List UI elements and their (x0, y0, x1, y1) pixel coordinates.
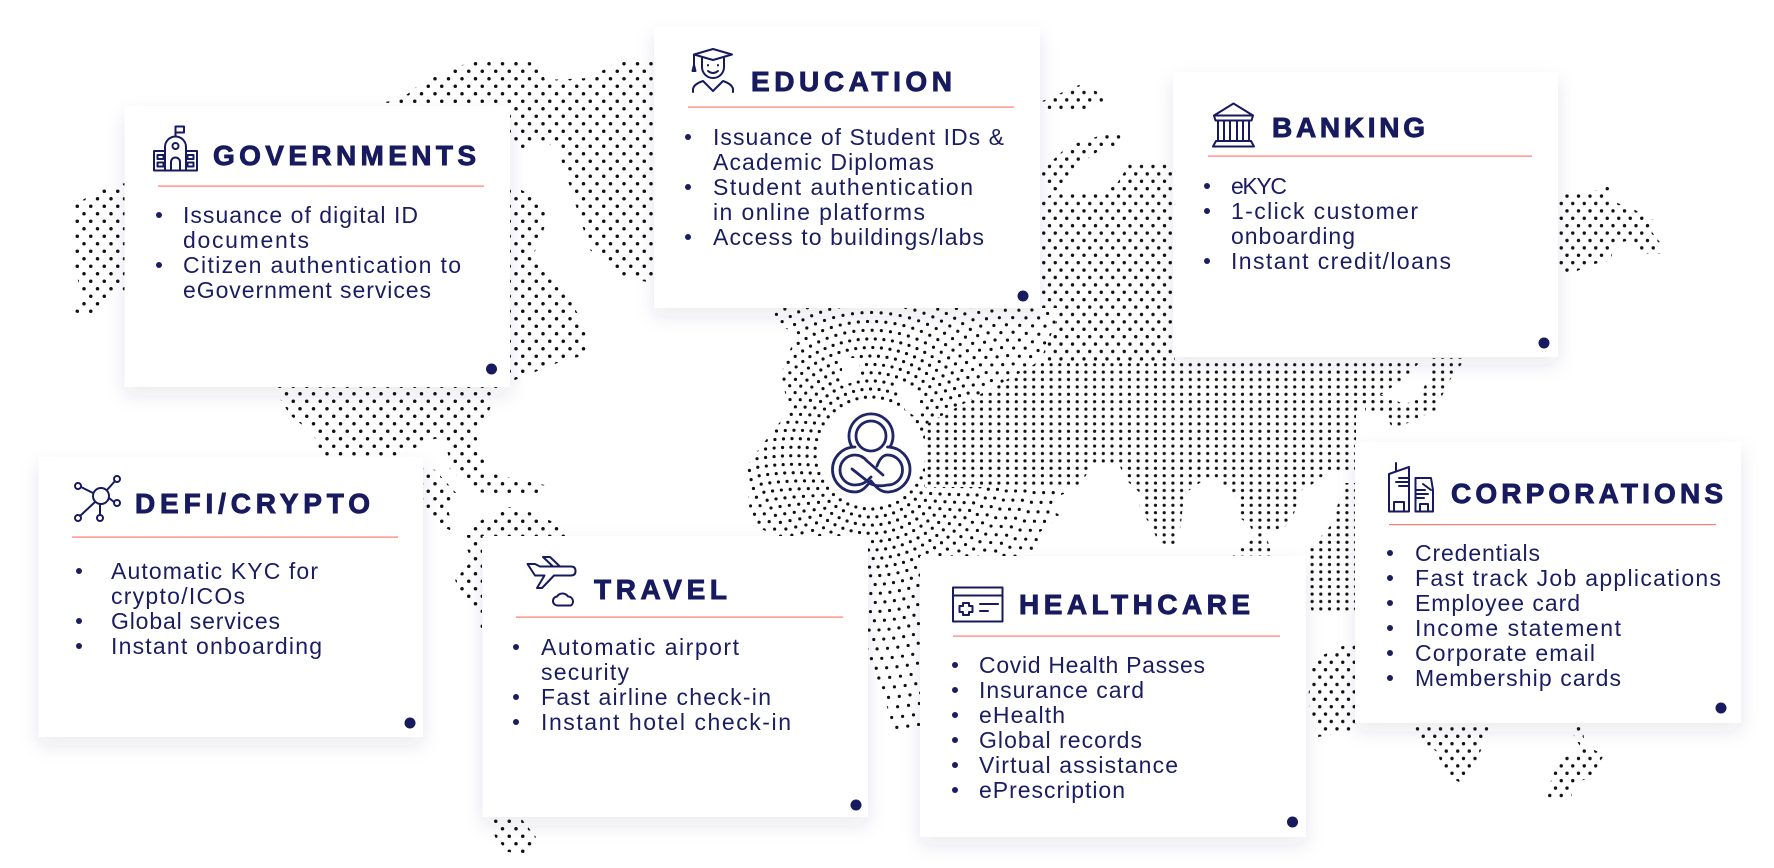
divider rule (1389, 524, 1716, 525)
corner dot (404, 718, 416, 728)
bullet list (1204, 173, 1451, 274)
bullet list: eGovernment services (183, 277, 431, 303)
bullet list: security (541, 659, 630, 685)
icon: bank (1213, 104, 1254, 146)
panel: banking (1173, 72, 1558, 357)
map: northern Eurasia and Pacific dot grid (1040, 85, 1662, 800)
bullet list: eKYC (1231, 173, 1287, 199)
bullet list: Issuance of Student IDs & (713, 124, 1004, 150)
bullet list: Instant credit/loans (1231, 248, 1451, 274)
bullet list: Covid Health Passes (979, 652, 1205, 678)
bullet list: Corporate email (1415, 640, 1595, 666)
divider rule (72, 536, 398, 538)
bullet list: Credentials (1415, 540, 1540, 566)
bullet list (156, 202, 461, 303)
bullet list: ePrescription (979, 777, 1125, 803)
logo (832, 414, 910, 492)
bullet list: in online platforms (713, 199, 925, 225)
bullet list: crypto/ICOs (111, 583, 245, 609)
divider rule (158, 186, 484, 187)
bullet list: Automatic airport (541, 634, 740, 660)
bullet list (952, 652, 1205, 803)
corner dot (850, 800, 862, 810)
heading: EDUCATION (751, 66, 952, 97)
bullet list (685, 124, 1004, 250)
bullet list: Issuance of digital ID (183, 202, 418, 228)
bullet list: Instant hotel check-in (541, 709, 791, 735)
bullet list: Insurance card (979, 677, 1144, 703)
panel: defi/crypto (38, 457, 423, 737)
bullet list: Citizen authentication to (183, 252, 461, 278)
bullet list: Global services (111, 608, 280, 634)
corner dot (1538, 338, 1550, 348)
icon: government building (154, 126, 197, 170)
corner dot (486, 364, 497, 374)
bullet list: onboarding (1231, 223, 1355, 249)
panel: education (654, 27, 1040, 308)
bullet list: Virtual assistance (979, 752, 1178, 778)
bullet list: Academic Diplomas (713, 149, 934, 175)
icon: airplane and cloud (528, 557, 576, 606)
divider rule (516, 616, 843, 618)
panel: governments (124, 106, 510, 387)
bullet list: Instant onboarding (111, 633, 322, 659)
corner dot (1287, 816, 1298, 828)
bullet list (513, 634, 791, 735)
bullet list: 1-click customer (1231, 198, 1418, 224)
bullet list: Global records (979, 727, 1142, 753)
heading: GOVERNMENTS (213, 140, 476, 171)
panel: healthcare (920, 556, 1306, 837)
icon: health card (953, 588, 1002, 622)
bullet list: Student authentication (713, 174, 973, 200)
icon: office buildings (1389, 463, 1433, 512)
heading: CORPORATIONS (1451, 478, 1723, 509)
heading: TRAVEL (594, 574, 727, 605)
map: Americas and Oceania dot grid (75, 58, 660, 854)
divider rule (1208, 156, 1532, 157)
map: white gaps near logo (842, 358, 921, 420)
bullet list: Access to buildings/labs (713, 224, 984, 250)
bullet list: Fast airline check-in (541, 684, 771, 710)
bullet list: Fast track Job applications (1415, 565, 1721, 591)
heading: HEALTHCARE (1019, 589, 1250, 620)
bullet list: eHealth (979, 702, 1065, 728)
divider rule (953, 636, 1280, 637)
bullet list: Membership cards (1415, 665, 1621, 691)
heading: DEFI/CRYPTO (135, 488, 370, 519)
heading: BANKING (1272, 112, 1425, 143)
icon: graduate (692, 49, 733, 92)
bullet list (76, 558, 322, 659)
panel: corporations (1355, 442, 1741, 723)
icon: network (75, 476, 120, 521)
map: concentric dot rings around logo (748, 308, 1064, 729)
bullet list (1387, 540, 1721, 691)
divider rule (688, 106, 1014, 108)
corner dot (1716, 702, 1726, 714)
map: Asia straight dot rows (925, 358, 1466, 612)
bullet list: documents (183, 227, 309, 253)
bullet list: Automatic KYC for (111, 558, 318, 584)
corner dot (1018, 290, 1028, 302)
panel: travel (482, 536, 868, 817)
bullet list: Employee card (1415, 590, 1580, 616)
bullet list: Income statement (1415, 615, 1622, 641)
